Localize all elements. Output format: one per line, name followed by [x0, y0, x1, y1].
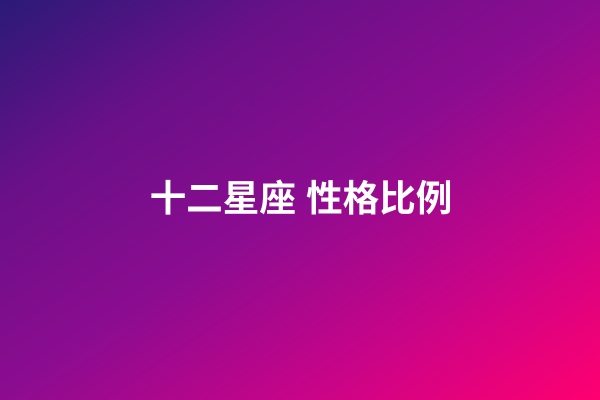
title: 十二星座 性格比例 [150, 178, 452, 219]
